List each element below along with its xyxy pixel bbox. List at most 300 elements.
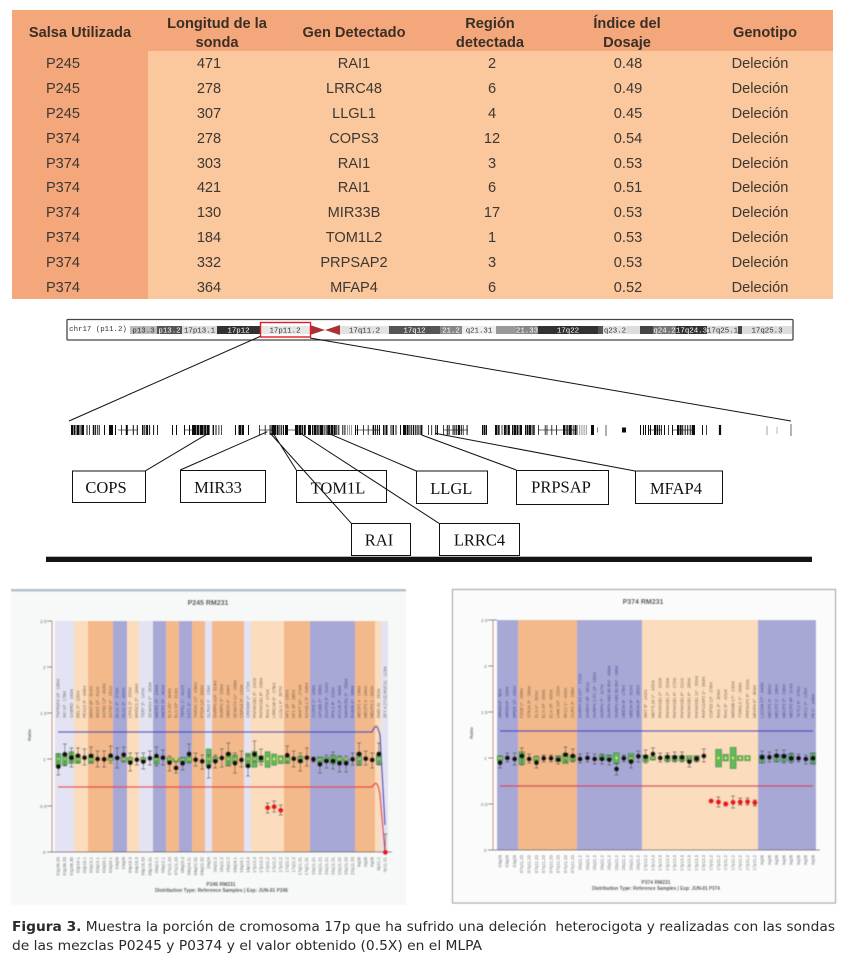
table rows: 184: [197, 230, 221, 246]
axes P374: 0: [484, 848, 487, 854]
axes P374: 0.5: [481, 802, 488, 808]
table rows: 471: [197, 56, 221, 72]
thick divider: [46, 557, 812, 562]
colour bands P374: [497, 620, 816, 850]
probe labels P245: RAB36 6* · 388nt: [350, 685, 355, 718]
axes P245: 2.5: [40, 619, 47, 625]
chromosome 17 ideogram: 21.33: [516, 328, 538, 336]
probe labels P245: TARDC 12* · 436nt: [193, 681, 198, 718]
probe labels P245: ZFY 4 (Y13) MUC11 · 113nt: [383, 665, 388, 718]
probe labels P374: F8 1* · 148nt: [810, 693, 815, 718]
probe labels P374: UBE3A 9* · 310nt: [628, 684, 633, 718]
x axis labels P374: Xq28: [810, 854, 815, 865]
probe labels P374: PRPSAP2 3* · 332nt: [745, 679, 750, 718]
x axis labels P374: 17p11.2: [716, 854, 721, 871]
table rows: 421: [197, 180, 221, 196]
gene labels: RAI: [365, 531, 393, 550]
x axis labels P374: 07q11.23: [548, 854, 553, 873]
axes P245: 0: [43, 850, 46, 856]
x axis labels P374: 15q11.2: [599, 854, 604, 871]
table header: Gen Detectado: [302, 25, 406, 41]
probe labels P245: PPIL2 8* · 220nt: [330, 686, 335, 718]
x axis labels P245: 02q13.1: [88, 856, 93, 873]
data points P374: [500, 754, 813, 769]
probe labels P245: LLGL1 4* · 307nt: [278, 685, 283, 718]
gene labels: MFAP4: [650, 479, 702, 498]
table rows: 12: [484, 131, 500, 147]
probe labels P374: TKTL1 5* · 370nt: [796, 685, 801, 718]
probe labels P245: KANSL1 3* · 348nt: [304, 682, 309, 718]
probe labels P245: DLG1 3* · 373nt: [115, 687, 120, 718]
table rows: P374: [46, 180, 80, 196]
x axis labels P374: 17p11.2: [723, 854, 728, 871]
probe labels P374: SNRPN HB2 85 BN* · 466nt: [607, 665, 612, 718]
x axis labels P245: Yp11.31: [383, 856, 388, 873]
table rows: P374: [46, 131, 80, 147]
x axis labels P245: 09q22.32: [193, 856, 198, 875]
zoom lines from band to gene track: [69, 336, 791, 421]
x axis labels P245: 08q23.3: [180, 856, 185, 873]
x axis labels P245: 15q24.1: [232, 856, 237, 873]
x axis labels P245: 17q21.31: [298, 856, 303, 875]
table rows: Deleción: [732, 56, 788, 72]
x axis labels P374: 17p11.2: [738, 854, 743, 871]
probe labels P245: TNFRSF4 1P · 136nt: [56, 678, 61, 718]
x axis labels P245: 22q11.23: [344, 856, 348, 875]
probe labels P245: UBE3A 4* · 166nt: [226, 684, 231, 718]
chromosome 17 ideogram: 17q24.3: [676, 328, 707, 336]
probe labels P245: LPIN1 2* · 232nt: [128, 686, 133, 718]
gene track: [71, 424, 791, 436]
threshold lines P245: [58, 726, 385, 852]
x axis labels P374: 15q11.2: [607, 854, 612, 871]
leader lines from genes to labels: [146, 432, 635, 523]
probe labels P245: MECP2 1 · 262nt: [370, 685, 375, 718]
table rows: 0.51: [614, 180, 642, 196]
x axis labels P374: 17p13.3: [679, 854, 684, 871]
x axis labels P374: 17p11.2: [730, 854, 735, 871]
x axis labels P374: Xq28: [774, 854, 779, 865]
x axis labels P245: 17p11.2: [272, 856, 276, 873]
probe labels P374: PAFAH1B1 6* · 211nt: [679, 677, 684, 718]
probe labels P245: MIER3 1P · 134nt: [154, 684, 159, 718]
x axis labels P245: 02p16.1: [82, 856, 87, 873]
probe labels P374: PAFAH1B1 11* · 200nt: [694, 675, 699, 718]
x axis labels P374: 07q11.23: [570, 854, 575, 873]
x axis labels P374: 03q29: [512, 854, 517, 867]
table rows: 0.53: [614, 156, 642, 172]
axes P245: 2: [43, 665, 46, 671]
probe labels P245: SEMA7A 11* · 199nt: [232, 679, 237, 718]
x axis labels P245: 07q11.23: [173, 856, 178, 875]
x axis labels P245: 17q11.2: [291, 856, 296, 873]
table rows: [46, 56, 788, 296]
selected band highlight: [260, 322, 310, 337]
probe labels P245: SMARCB1 3* · 250nt: [344, 678, 348, 718]
probe labels P245: PAFAH1B1 3* · 142nt: [252, 677, 257, 718]
chromosome 17 ideogram: 17q11.2: [349, 328, 380, 336]
probe labels P245: ELN 23* · 313nt: [173, 687, 178, 718]
probe labels P374: SNRPN C-P1 1P · 160nt: [592, 671, 597, 718]
x axis labels P374: 17p13.3: [701, 854, 706, 871]
table rows: 307: [197, 106, 221, 122]
x axis labels P245: Xp21.1: [376, 856, 381, 871]
probe labels P374: UBE3A 9* · 283nt: [636, 684, 641, 718]
x axis labels P374: 17p13.3: [694, 854, 699, 871]
x axis labels P374: 17p13.3: [665, 854, 670, 871]
probe labels P245: NF1 1P · 130nt: [285, 689, 290, 718]
probe labels P374: MECP2 4P · 314nt: [789, 682, 794, 718]
probe labels P245: DLG1 3* · 482nt: [121, 687, 126, 718]
x axis labels P374: 17p13.3: [650, 854, 655, 871]
probe labels P245: SNRPN 3* · 200nt: [219, 683, 224, 718]
table header: Salsa Utilizada: [29, 25, 132, 41]
table header: Índice del: [593, 15, 661, 32]
probe labels P245: SNRPN u1P · 314nt: [213, 680, 218, 718]
probe labels P245: CSPG4 3* · 131nt: [239, 684, 244, 718]
chromosome 17 ideogram: q24.2: [653, 328, 676, 336]
table rows: Deleción: [732, 230, 788, 246]
x axis labels P374: 15q11.2: [628, 854, 633, 871]
axes P374: 1.5: [481, 710, 488, 716]
x axis labels P374: 07q11.23: [534, 854, 539, 873]
probe labels P245: RAI1 2* · 471nt: [265, 689, 270, 718]
gene labels: [72, 470, 722, 556]
table rows: P245: [46, 106, 80, 122]
axes P374: 2.5: [481, 618, 488, 624]
x axis labels P245: 15q11.2: [213, 856, 218, 873]
table rows: 278: [197, 81, 221, 97]
x axis labels P245: Xq28: [363, 856, 368, 867]
probe labels P245: PTCH 12* · 332nt: [200, 684, 205, 718]
table rows: MIR33B: [328, 205, 380, 221]
x axis labels P245: 07q11.23: [167, 856, 172, 875]
probe labels P374: [497, 665, 815, 718]
probe labels P245: GLRA3 1* · 136nt: [206, 684, 211, 718]
table rows: LLGL1: [332, 106, 376, 122]
probe labels P374: METTL16 1* · 425nt: [650, 679, 655, 718]
probe labels P374: ELN 2P · 400nt: [548, 689, 553, 718]
probe labels P374: MRD5AP · 96nt: [497, 688, 502, 718]
probe labels P245: GP1BB 2* · 208nt: [317, 684, 322, 718]
table rows: MFAP4: [330, 280, 378, 296]
x axis labels P245: 22q11.21: [317, 856, 322, 875]
table rows: TOM1L2: [326, 230, 382, 246]
probe labels P245: SKI 1P · 178nt: [62, 690, 67, 718]
table rows: 0.54: [614, 131, 642, 147]
footer P245: [155, 882, 288, 894]
table rows: 0.53: [614, 205, 642, 221]
gene labels: LLGL: [430, 479, 472, 498]
gene labels: COPS: [85, 478, 127, 497]
footer P245: P245 RM231: [206, 882, 236, 888]
x axis labels P245: 01p36.33: [62, 856, 67, 875]
table header: Longitud de la: [167, 16, 268, 32]
table rows: 3: [488, 255, 496, 271]
probe labels P245: NF1 4P · 180nt: [291, 689, 296, 718]
chart title P374: P374 RM231: [623, 599, 664, 606]
x axis labels P374: 03q29: [505, 854, 510, 867]
probe labels P245: SEMA5A 2* · 283nt: [147, 681, 152, 718]
panel: MLPA chart P374: [452, 590, 836, 903]
chromosome 17 ideogram: 21.2: [442, 328, 460, 336]
table rows: 303: [197, 156, 221, 172]
table rows: Deleción: [732, 180, 788, 196]
probe boxes P245: [56, 749, 381, 767]
chromosome 17 ideogram: p13.3: [132, 328, 155, 336]
chromosome 17 ideogram: p13.2: [158, 328, 181, 336]
x axis labels P374: 17p13.3: [672, 854, 677, 871]
probe labels P245: PEX13 3* · 409nt: [82, 685, 87, 718]
x axis labels P245: 10q24: [206, 856, 211, 869]
x axis labels P374: Xq28: [767, 854, 772, 865]
x axis labels P374: 07q11.23: [541, 854, 546, 873]
table rows: RAI1: [338, 56, 370, 72]
probe labels P374: SNRPN UP · 391nt: [585, 681, 590, 718]
x axis labels P245: 17q21.31: [304, 856, 309, 875]
axes P374: Ratio: [469, 727, 475, 739]
table header: Genotipo: [733, 25, 797, 41]
probe labels P245: MECP2 3 · 184nt: [363, 685, 368, 718]
x axis labels P374: 07q11.23: [526, 854, 532, 873]
table rows: 364: [197, 280, 221, 296]
table rows: RAI1: [338, 180, 370, 196]
probe labels P374: MRD5AP · 160nt: [505, 686, 510, 718]
x axis labels P245: 15q11.2: [226, 856, 231, 873]
probe labels P374: MECP2 2* · 238nt: [781, 683, 786, 718]
table rows: 1: [488, 230, 496, 246]
table rows: P245: [46, 56, 80, 72]
table header: Dosaje: [603, 35, 651, 51]
table rows: Deleción: [732, 156, 788, 172]
x axis labels P374: 15q11.2: [585, 854, 590, 871]
table: MLPA probes: [12, 10, 833, 299]
table rows: 2: [488, 56, 496, 72]
chart title P245: P245 RM231: [188, 600, 229, 607]
probe labels P374: RAP1GAP2 1* · 340nt: [701, 676, 706, 718]
table rows: P374: [46, 156, 80, 172]
chromosome 17 ideogram: 17q22: [557, 328, 579, 336]
axes P374: 1: [484, 756, 487, 762]
x axis labels P245: 03q29: [121, 856, 126, 869]
table rows: 0.48: [614, 56, 642, 72]
x axis labels P374: 03q29: [497, 854, 502, 867]
probe labels P374: MNT 8* · 142nt: [643, 689, 648, 718]
x axis labels P374: Xq28: [789, 854, 794, 865]
table rows: 130: [197, 205, 221, 221]
x axis labels P245: 04p16.3: [128, 856, 133, 873]
chromosome 17 ideogram: chr17 (p11.2): [69, 326, 127, 334]
probe labels P374: FZD8 1* · 208nt: [519, 687, 524, 718]
error bars P245: [56, 741, 387, 852]
probe labels P374: MECP2 4* · 360nt: [767, 683, 772, 718]
x axis labels P374: 15q11.2: [621, 854, 626, 871]
table rows: 278: [197, 131, 221, 147]
deleted probes P245: [268, 807, 385, 852]
table rows: P374: [46, 205, 80, 221]
probe labels P374: PAFAH1B1 2* · 152nt: [658, 677, 663, 718]
x axis labels P245: 22q11.21: [330, 856, 335, 875]
chromosome 17 ideogram: q21.31: [466, 328, 493, 336]
error bars P374: [498, 747, 815, 808]
probe labels P245: WHSC1 2* · 184nt: [134, 683, 139, 718]
x axis labels P245: 02q33.1: [102, 856, 106, 873]
x axis labels P374: 15q11.2: [592, 854, 597, 871]
x axis labels P245: 01p36.30: [69, 856, 74, 875]
table rows: LRRC48: [326, 81, 382, 97]
yellow medians P245: [58, 758, 379, 759]
chromosome 17 ideogram: 17p13.1: [184, 328, 216, 336]
x axis labels P374: 17p13.3: [687, 854, 692, 871]
table rows: P245: [46, 81, 80, 97]
gene labels: MIR33: [194, 478, 242, 497]
x axis labels P374: 07q11.23: [563, 854, 568, 873]
x axis labels P245: 17q11.2: [285, 856, 290, 873]
footer P245: Distribution Type: Reference Samples | Exp: JUN-01 P245: [155, 888, 288, 894]
axes P374: 2: [484, 664, 487, 670]
x axis labels P245: 22q11.22: [337, 856, 342, 875]
probe labels P245: GABRD · 160nt: [69, 688, 74, 718]
chromosome 17 ideogram: 17p12: [227, 328, 250, 336]
table rows: 0.52: [614, 280, 642, 296]
table rows: RAI1: [338, 156, 370, 172]
table rows: 0.53: [614, 230, 642, 246]
probe labels P374: L1CAM 27* · 340nt: [759, 682, 764, 718]
yellow medians P374: [500, 757, 762, 758]
table rows: PRPSAP2: [320, 255, 388, 271]
x axis labels P245: 05p15.31: [147, 856, 152, 875]
probe labels P374: STK34 3* · 290nt: [526, 685, 532, 718]
axes P245: 1: [43, 757, 46, 763]
x axis labels P245: 02q13.1: [95, 856, 100, 873]
probe labels P374: SNRPN 7* · 417nt: [599, 683, 604, 718]
probe labels P374: LIMK 1D* · 232nt: [556, 685, 561, 718]
footer P374: P374 RM231: [641, 880, 671, 886]
x axis labels P245: 05q12.1: [154, 856, 159, 873]
probe labels P374: MFAP4 6* · 364nt: [752, 684, 757, 718]
probe labels P245: MIER3 2P · 492nt: [160, 684, 165, 718]
probe labels P245: MECP2 4 · 148nt: [356, 685, 362, 718]
probe labels P245: SNAP29 3* · 310nt: [324, 682, 329, 718]
x axis labels P245: [56, 856, 388, 875]
probe labels P374: PAFAH1B1 6* · 190nt: [687, 677, 692, 718]
probe labels P374: RFC2 1* · 403nt: [563, 687, 568, 718]
probe labels P245: LRRC48 6* · 278nt: [272, 682, 276, 718]
figure caption: Figura 3. Muestra la porción de cromosoma 17p que ha sufrido una deleción heterocigota y realizadas con las sondas: [12, 919, 835, 935]
probe labels P374: DKC1 2* · 120nt: [803, 687, 808, 718]
table rows: Deleción: [732, 280, 788, 296]
table rows: 6: [488, 180, 496, 196]
table rows: P374: [46, 255, 80, 271]
table rows: Deleción: [732, 205, 788, 221]
probe labels P374: ELN 4* · 352nt: [534, 690, 539, 718]
x axis labels P245: 08q24.11: [186, 856, 192, 875]
x axis labels P245: Xq28: [370, 856, 375, 867]
x axis labels P245: 17p11.2: [278, 856, 283, 873]
x axis labels P245: Xq28: [356, 856, 362, 867]
table rows: Deleción: [732, 255, 788, 271]
probe labels P245: TERT 2* · 147nt: [141, 687, 146, 718]
probe labels P245: DMD 45 · 292nt: [376, 688, 381, 718]
probe labels P374: RAI1 6* · 421nt: [723, 689, 728, 718]
x axis labels P374: Xq28: [803, 854, 808, 865]
probe labels P245: TRPS1 1* · 441nt: [180, 684, 185, 718]
x axis labels P374: Xq28: [759, 854, 764, 865]
chromosome 17 ideogram: 17q25.1: [707, 328, 739, 336]
deleted probes P374: [711, 801, 755, 804]
table rows: 3: [488, 156, 496, 172]
table rows: 0.53: [614, 255, 642, 271]
x axis labels P374: 17p13.3: [658, 854, 663, 871]
chromosome 17 ideogram: q23.2: [604, 328, 626, 336]
x axis labels P374: 07q11.23: [556, 854, 561, 873]
x axis labels P245: 15q24.1: [239, 856, 244, 873]
axes P245: [27, 619, 392, 856]
x axis labels P245: 22q11.21: [324, 856, 329, 875]
probe labels P245: KCNJ4 2* · 346nt: [337, 685, 342, 718]
table rows: 6: [488, 280, 496, 296]
figure caption: de las mezclas P0245 y P0374 y el valor obtenido (0.5X) en el MLPA: [12, 938, 483, 954]
x axis labels P245: 05p15.33: [141, 856, 146, 875]
chromosome 17 ideogram: 17p11.2: [269, 328, 301, 336]
axes P245: 0.5: [40, 804, 47, 810]
footer P374: Distribution Type: Reference Samples | Exp: JUN-01 P374: [592, 886, 720, 892]
table header: [29, 15, 797, 51]
chromosome 17 ideogram: [67, 320, 793, 340]
probe labels P374: PAFAH1B1 6* · 172nt: [672, 677, 677, 718]
x axis labels P245: 04p16.3: [134, 856, 139, 873]
probe boxes P374: [497, 747, 816, 769]
probe labels P245: ELN 20* · 364nt: [167, 687, 172, 718]
table header: Región: [465, 16, 515, 32]
probe labels P245: PAFAH1B1 8* · 238nt: [258, 677, 263, 718]
x axis labels P374: 07q11.23: [519, 854, 524, 873]
x axis labels P245: 17p11.2: [265, 856, 270, 873]
probe labels P374: UBE3A 9* · 178nt: [621, 684, 626, 718]
probe labels P245: SATB2 12* · 463nt: [102, 683, 106, 718]
x axis labels P245: 22q11.23: [350, 856, 355, 875]
probe labels P374: CLIP2 3* · 238nt: [570, 686, 575, 718]
gene labels: LRRC4: [454, 531, 505, 550]
x axis labels P245: 17p13.3: [258, 856, 263, 873]
table header: sonda: [196, 35, 239, 51]
probe labels P245: MSX2 4P · 314nt: [88, 685, 93, 718]
probe labels P374: TOM1L2 1* · 184nt: [738, 682, 743, 718]
x axis labels P245: 09q22.32: [200, 856, 205, 875]
table rows: Deleción: [732, 81, 788, 97]
threshold lines P374: [500, 731, 813, 786]
table rows: 6: [488, 81, 496, 97]
probe labels P374: SNRPN E4-UC* · 270nt: [577, 673, 582, 718]
chromosome 17 ideogram: 17q12: [403, 328, 426, 336]
figure caption: [12, 919, 835, 954]
table rows: Deleción: [732, 131, 788, 147]
probe labels P245: CREBBP 1* · 172nt: [245, 681, 250, 718]
table rows: P374: [46, 230, 80, 246]
x axis labels P374: 15q11.2: [614, 854, 619, 871]
table rows: P374: [46, 280, 80, 296]
probe labels P245: MAPT 10* · 274nt: [298, 684, 303, 718]
gene labels: PRPSAP: [531, 478, 591, 497]
probe labels P245: [56, 665, 388, 718]
probe labels P374: PAFAH1B1 2* · 319nt: [665, 677, 670, 718]
table rows: 332: [197, 255, 221, 271]
x axis labels P245: 22q11.21: [311, 856, 316, 875]
probe labels P245: CLDN5 1* · 196nt: [311, 684, 316, 718]
table rows: COPS3: [329, 131, 379, 147]
axes P245: Ratio: [27, 729, 33, 741]
data points P245: [58, 754, 379, 768]
